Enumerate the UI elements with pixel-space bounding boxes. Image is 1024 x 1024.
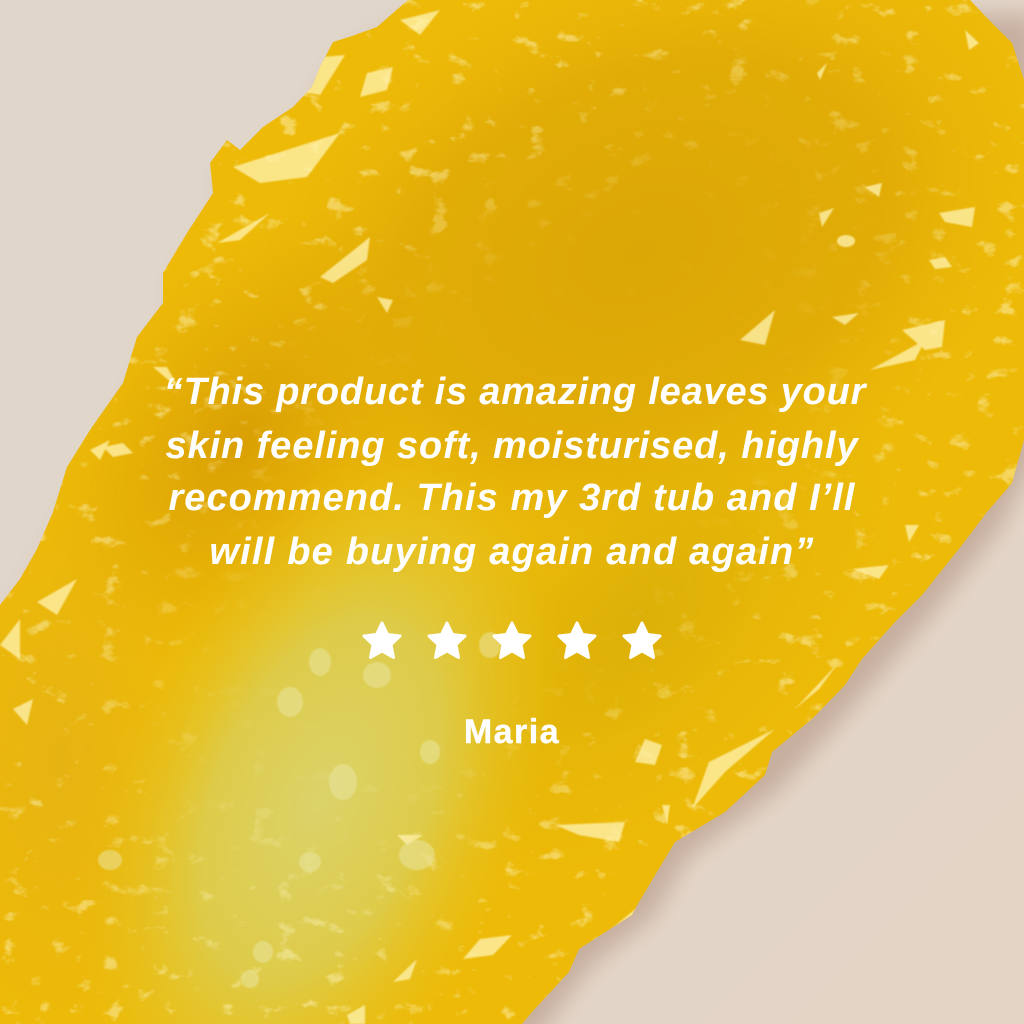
review quote: will be buying again and again” <box>209 531 815 573</box>
five star rating <box>362 621 662 660</box>
translucent bubbles <box>98 632 501 988</box>
reviewer name: Maria <box>464 713 560 751</box>
review quote: skin feeling soft, moisturised, highly <box>166 425 858 467</box>
review quote: recommend. This my 3rd tub and I’ll <box>168 477 856 519</box>
review quote: “This product is amazing leaves your <box>164 371 866 413</box>
review quote <box>164 371 868 573</box>
